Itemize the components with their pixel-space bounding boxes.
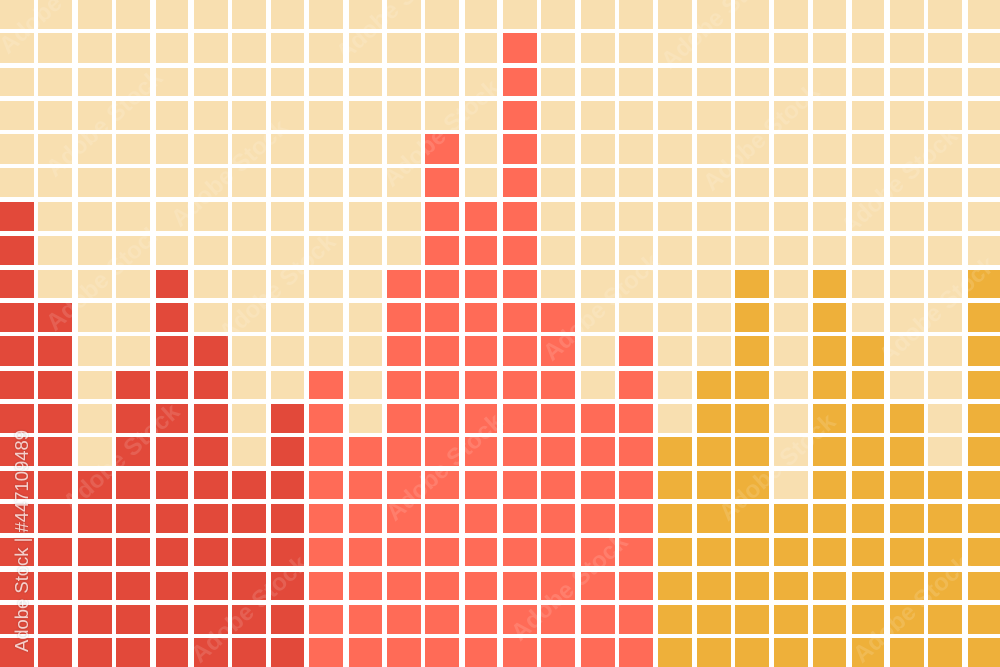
amber bars — [658, 270, 1000, 667]
faint diagonal watermarks: Adobe Stock — [714, 408, 842, 526]
faint diagonal watermarks: Adobe Stock — [58, 398, 186, 516]
faint diagonal watermarks: Adobe Stock — [848, 550, 976, 667]
faint diagonal watermarks: Adobe Stock — [874, 251, 1000, 369]
salmon bars — [309, 33, 653, 667]
faint diagonal watermarks: Adobe Stock — [698, 78, 826, 196]
red bars — [0, 202, 304, 667]
faint diagonal watermarks: Adobe Stock — [381, 408, 509, 526]
faint diagonal watermarks: Adobe Stock — [41, 64, 169, 182]
faint diagonal watermarks: Adobe Stock — [506, 528, 634, 646]
faint diagonal watermarks: Adobe Stock — [166, 114, 294, 232]
faint diagonal watermarks: Adobe Stock — [378, 74, 506, 192]
faint diagonal watermarks: Adobe Stock — [186, 550, 314, 667]
vertical stock ID text: Adobe Stock | #447109489 — [12, 430, 32, 652]
faint diagonal watermarks: Adobe Stock — [41, 218, 169, 336]
faint diagonal watermarks: Adobe Stock — [538, 248, 666, 366]
faint diagonal watermarks: Adobe Stock — [836, 122, 964, 240]
faint diagonal watermarks: Adobe Stock — [214, 228, 342, 346]
